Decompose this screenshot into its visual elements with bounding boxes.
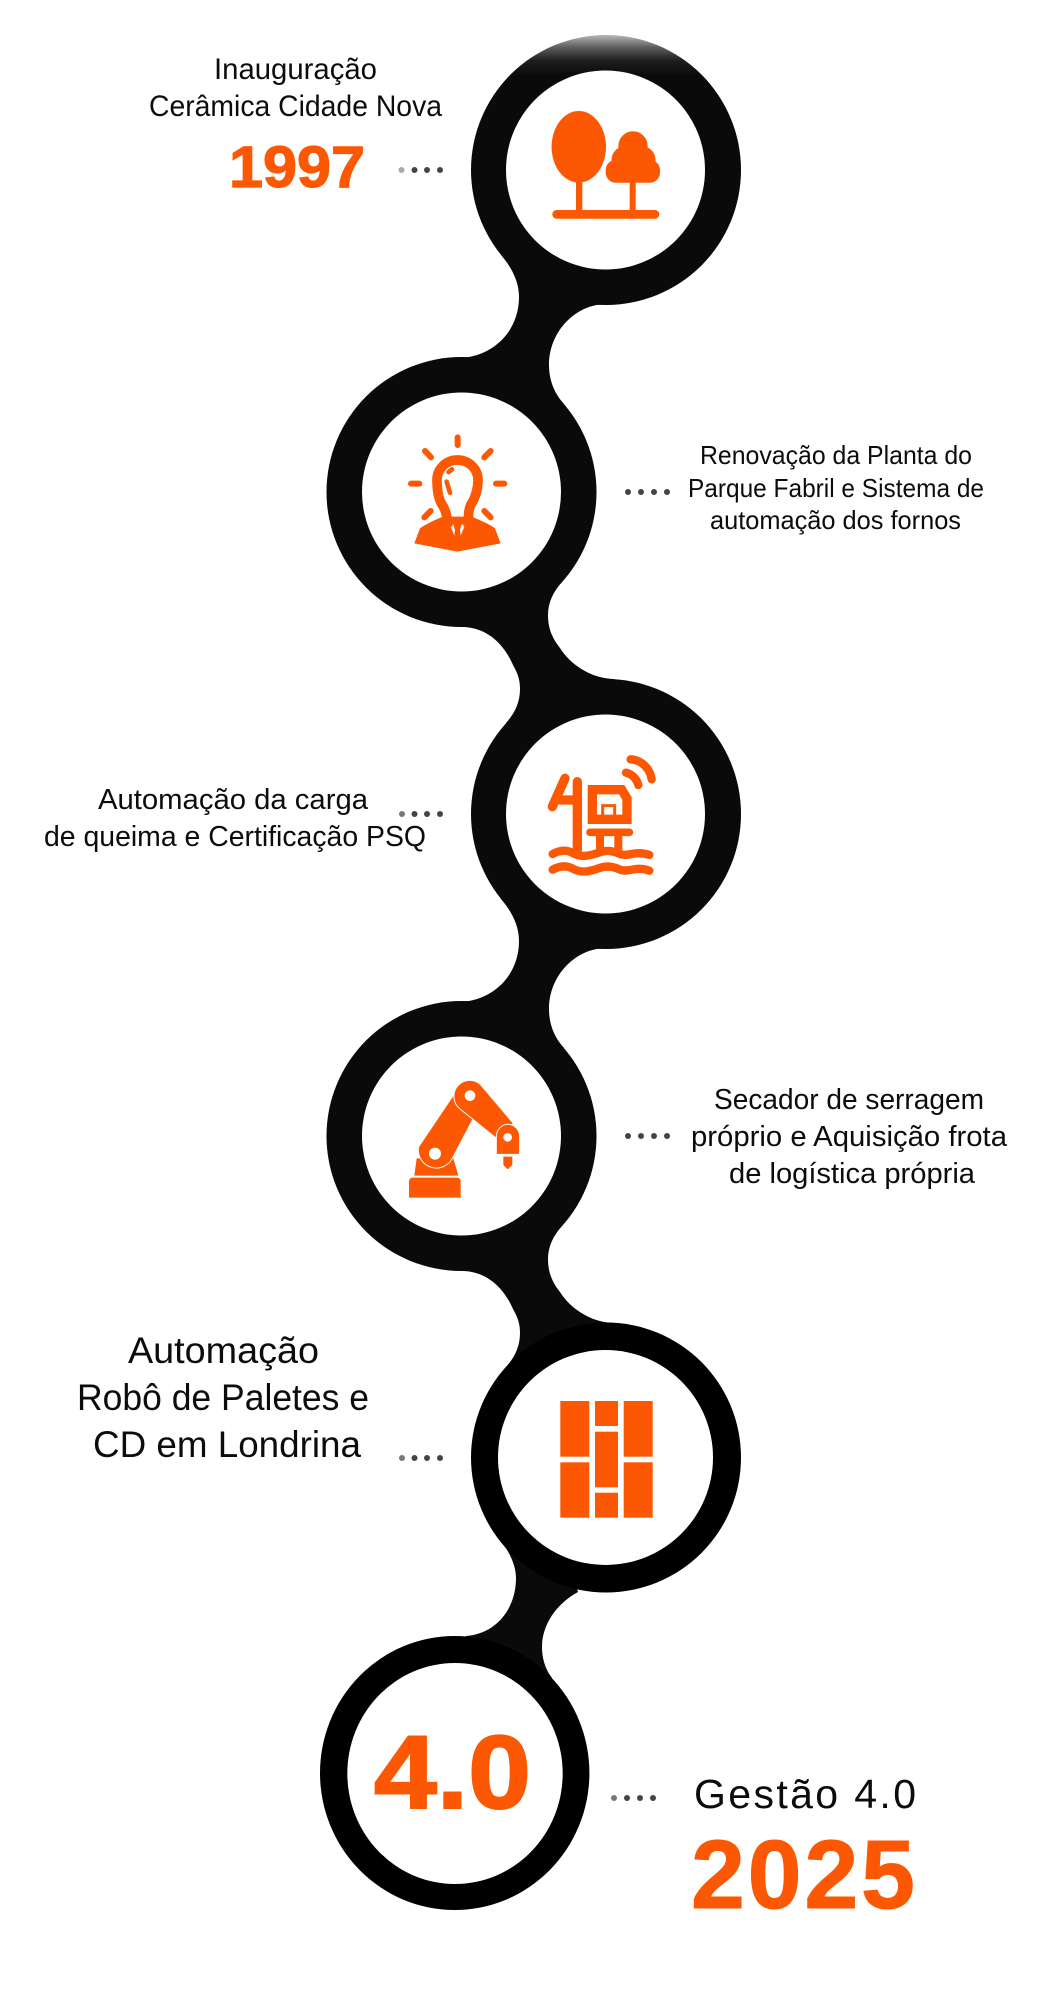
ring 5 centre	[498, 1350, 713, 1565]
dots 2	[625, 489, 670, 495]
label: Secador: Secador de serragem	[714, 1084, 984, 1116]
label: Automação da carga: de queima e Certificação PSQ	[44, 821, 426, 853]
ring 5	[471, 1322, 741, 1592]
icon: trees	[552, 111, 660, 219]
connector 5 to 6	[466, 1530, 578, 1700]
label: Automação Robô: Robô de Paletes e	[77, 1377, 369, 1418]
text: company: Cerâmica Cidade Nova	[149, 90, 442, 123]
connector 4 to 5	[462, 1204, 640, 1404]
label: Renovação	[688, 440, 984, 535]
label: Inauguração 1997	[149, 53, 442, 200]
ring 2	[326, 357, 596, 627]
connector 2 to 3	[462, 560, 640, 760]
connector 1 to 2	[457, 250, 620, 420]
dots 1	[398, 167, 443, 173]
ring 4 centre	[362, 1036, 561, 1236]
label: Automação da carga	[44, 784, 426, 853]
year 2025: 2025	[691, 1820, 915, 1929]
icon: brick wall	[560, 1401, 653, 1518]
label: Secador: próprio e Aquisição frota	[691, 1121, 1008, 1153]
dots 5	[399, 1455, 443, 1461]
icon: idea person	[411, 437, 504, 552]
dots 4	[625, 1133, 670, 1139]
icon: crane wifi house	[552, 759, 652, 872]
label: Secador: de logística própria	[729, 1158, 976, 1190]
ring 3	[471, 679, 741, 949]
timeline chain of rings and connectors	[320, 35, 741, 1910]
ring 2 centre	[362, 392, 561, 592]
connector 3 to 4	[457, 894, 620, 1064]
label: Renovação: automação dos fornos	[710, 505, 961, 535]
ring 6 centre	[347, 1663, 563, 1884]
dots 3	[399, 811, 443, 817]
label: Automação Robô: Automação	[128, 1330, 319, 1371]
label: Automação Robô: CD em Londrina	[93, 1424, 361, 1465]
ring 1 centre	[506, 70, 705, 270]
ring 3 centre	[506, 714, 705, 914]
label: Automação da carga: Automação da carga	[98, 784, 369, 816]
year 1997: 1997	[229, 135, 365, 200]
label: Renovação: Renovação da Planta do	[700, 440, 972, 470]
ring 4	[326, 1001, 596, 1271]
ring 1	[471, 35, 741, 305]
label: Gestão 4.0: Gestão 4.0	[694, 1771, 916, 1817]
label: Automação Robô	[77, 1330, 369, 1465]
text: inauguration: Inauguração	[214, 53, 377, 86]
icon: robot arm	[409, 1080, 520, 1198]
label: Secador	[691, 1084, 1008, 1190]
ring 6	[320, 1636, 589, 1910]
dots 6	[611, 1795, 656, 1801]
label: Renovação: Parque Fabril e Sistema de	[688, 473, 984, 503]
badge: 4.0: 4.0	[374, 1715, 531, 1831]
